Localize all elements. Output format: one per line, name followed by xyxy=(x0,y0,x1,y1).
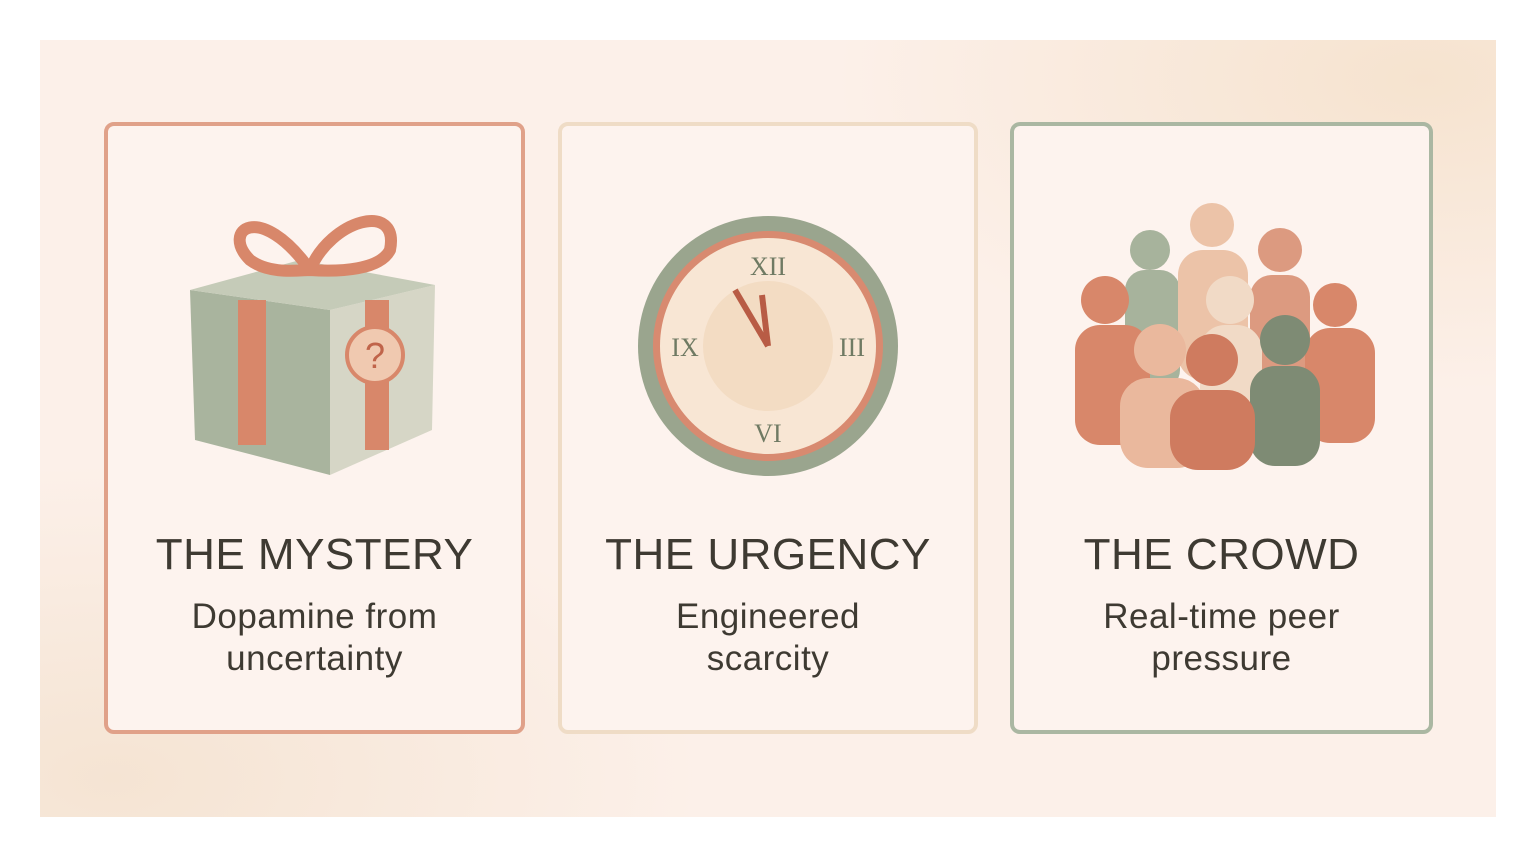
heading: the urgency: THE URGENCY xyxy=(605,530,931,579)
text: mystery subtitle xyxy=(192,597,437,678)
text: mystery subtitle: Dopamine from xyxy=(192,597,437,636)
heading: the mystery: THE MYSTERY xyxy=(156,530,473,579)
text: urgency subtitle: Engineered xyxy=(676,597,860,636)
text: crowd subtitle: Real-time peer xyxy=(1103,597,1340,636)
icon: clock: IX xyxy=(671,333,699,362)
card: mystery xyxy=(104,122,525,734)
text: mystery subtitle: uncertainty xyxy=(226,639,403,678)
text: crowd subtitle xyxy=(1103,597,1340,678)
icon: clock: VI xyxy=(754,419,782,448)
text: crowd subtitle: pressure xyxy=(1151,639,1292,678)
icon: clock: XII xyxy=(750,252,786,281)
card: urgency xyxy=(558,122,978,734)
icon: clock: III xyxy=(839,333,865,362)
card: crowd xyxy=(1010,122,1433,734)
icon: gift box: ? xyxy=(365,335,385,376)
heading: the crowd: THE CROWD xyxy=(1084,530,1359,579)
text: urgency subtitle: scarcity xyxy=(707,639,829,678)
text: urgency subtitle xyxy=(676,597,860,678)
